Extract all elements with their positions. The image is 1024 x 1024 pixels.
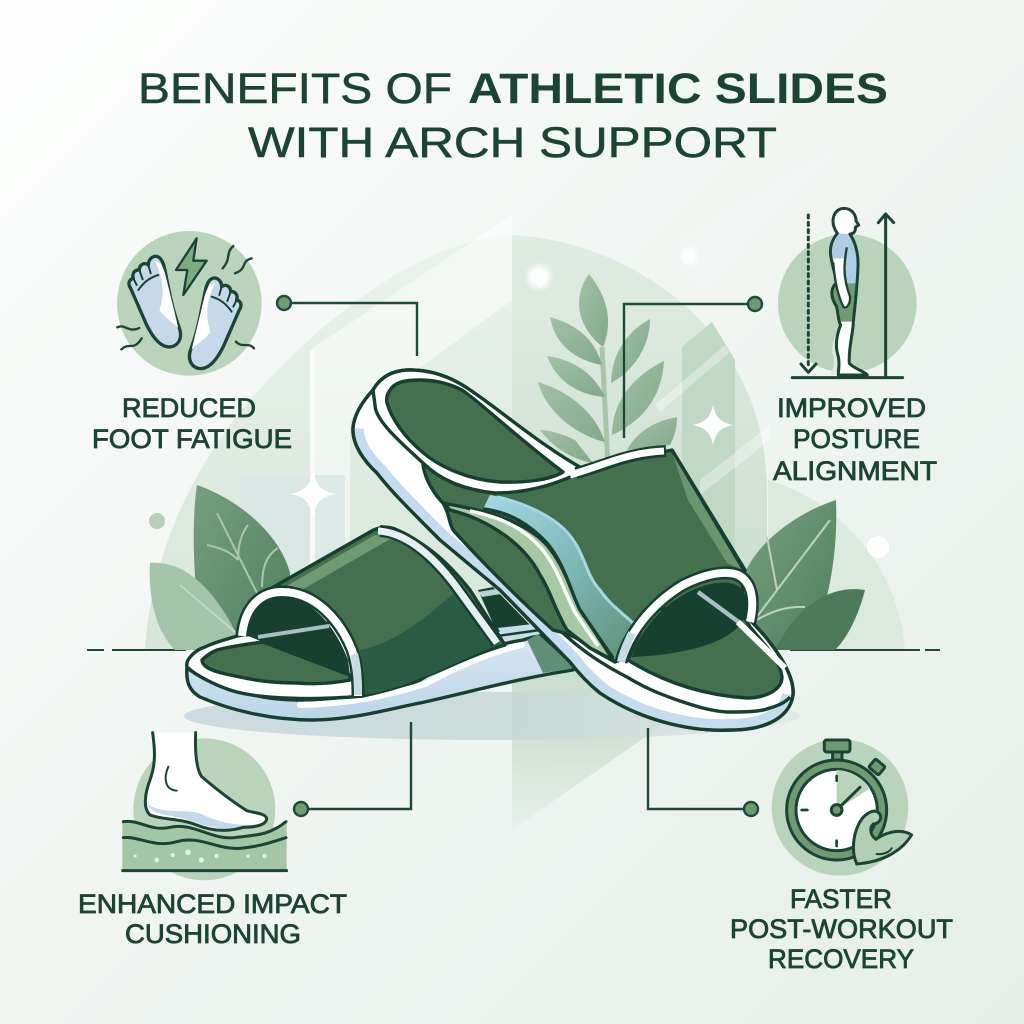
icon: posture bbox=[778, 208, 917, 378]
title: BENEFITS OF bbox=[138, 65, 452, 113]
label: enhanced impact cushioning: ENHANCED IMPACT bbox=[78, 889, 347, 919]
left slide rear dark band bbox=[478, 587, 532, 632]
left slide rim bbox=[187, 620, 363, 698]
connector: posture bbox=[624, 297, 762, 438]
left slide strap rim bbox=[380, 531, 497, 643]
left slide sole highlight bbox=[300, 645, 522, 705]
left slide strap shade bbox=[360, 590, 500, 695]
flexed arm bbox=[853, 811, 912, 864]
label: faster post-workout recovery: FASTER bbox=[790, 884, 892, 914]
left slide sole bbox=[187, 635, 573, 720]
connector: reduced foot fatigue bbox=[277, 296, 417, 356]
left slide interior bbox=[248, 597, 350, 675]
right slide opening rim bbox=[621, 573, 752, 662]
right slide body bbox=[353, 370, 793, 730]
right leaves bbox=[743, 500, 889, 650]
left foot bbox=[129, 256, 181, 347]
foot bbox=[145, 733, 267, 830]
title: ATHLETIC SLIDES bbox=[468, 65, 888, 113]
icon: tired feet bbox=[117, 231, 262, 376]
right slide band blue bbox=[483, 495, 635, 660]
person bbox=[830, 208, 867, 375]
icon: stopwatch bbox=[772, 739, 912, 876]
horizon lines bbox=[87, 649, 940, 651]
connector: cushioning bbox=[294, 722, 411, 816]
title: WITH ARCH SUPPORT bbox=[248, 119, 777, 167]
right slide outline bbox=[353, 370, 793, 730]
right slide heel rim bbox=[373, 370, 585, 493]
right slide blue side bbox=[353, 428, 793, 730]
right slide rim line bbox=[560, 630, 790, 712]
right slide strap light edge bbox=[672, 452, 743, 570]
label: improved posture alignment: POSTURE bbox=[793, 424, 920, 454]
connector: recovery bbox=[648, 728, 758, 816]
label: reduced foot fatigue: FOOT FATIGUE bbox=[92, 424, 292, 454]
ground bbox=[792, 373, 903, 382]
icon: foot on cushion bbox=[122, 733, 287, 880]
right slide heel footbed bbox=[387, 380, 563, 482]
cushion lines bbox=[123, 821, 287, 871]
label: faster post-workout recovery: RECOVERY bbox=[768, 944, 914, 974]
right slide bbox=[353, 370, 793, 730]
label: improved posture alignment: ALIGNMENT bbox=[773, 456, 937, 486]
squiggles bbox=[117, 246, 254, 349]
label: enhanced impact cushioning: CUSHIONING bbox=[125, 919, 301, 949]
right slide front footbed bbox=[628, 600, 782, 698]
left slide bbox=[187, 527, 575, 720]
label: reduced foot fatigue: REDUCED bbox=[122, 393, 256, 423]
label: faster post-workout recovery bbox=[730, 884, 953, 974]
right foot bbox=[189, 278, 241, 369]
left slide footbed bbox=[202, 642, 350, 684]
right slide top strip bbox=[576, 451, 666, 473]
sparkles bbox=[290, 245, 733, 518]
right slide inner strap line bbox=[698, 592, 740, 623]
label: enhanced impact cushioning bbox=[78, 889, 347, 949]
left slide strap bbox=[270, 527, 505, 696]
dotted arrow bbox=[804, 215, 813, 365]
title bbox=[138, 65, 888, 167]
right slide dark interior bbox=[632, 582, 748, 657]
ground shadow bbox=[184, 692, 800, 740]
left leaves bbox=[149, 485, 290, 650]
label: improved posture alignment bbox=[773, 393, 937, 486]
lightning bbox=[176, 238, 207, 295]
right slide band white stripe bbox=[470, 511, 598, 646]
right slide upper and wall bbox=[423, 450, 745, 662]
left slide opening rim bbox=[242, 592, 358, 696]
right slide band green bbox=[443, 503, 613, 660]
background plant bbox=[538, 274, 677, 465]
left slide strap light edge bbox=[283, 535, 392, 591]
label: faster post-workout recovery: POST-WORKOUT bbox=[730, 914, 953, 944]
label: improved posture alignment: IMPROVED bbox=[777, 393, 926, 423]
label: reduced foot fatigue bbox=[92, 393, 292, 454]
up arrow bbox=[878, 214, 894, 377]
